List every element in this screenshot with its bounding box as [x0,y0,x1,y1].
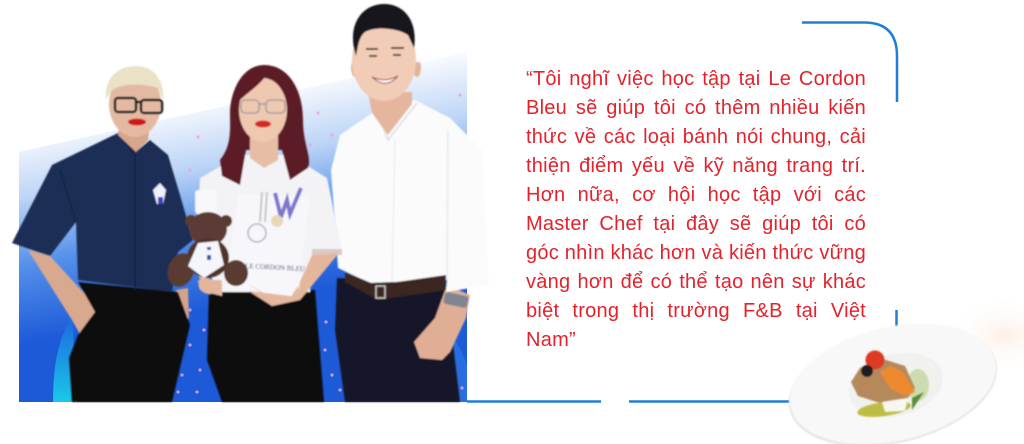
neck [250,135,278,168]
navy shirt [12,133,193,292]
frame line: right short [895,310,898,327]
man's ears [351,62,421,77]
person: man in white shirt [331,4,489,402]
quote text: biệt trong thị trường F&B tại Việt [526,300,866,322]
teddy bear [163,212,248,294]
quote text: Bleu sẽ giúp tôi có thêm nhiều kiến [526,97,866,119]
student shirt [197,155,342,292]
quote text: “Tôi nghĩ việc học tập tại Le Cordon [526,68,866,90]
badge [153,183,166,204]
sauce [856,398,912,420]
panel: blue gradient backdrop [19,52,467,402]
well [842,343,950,427]
person: woman in navy shirt [12,66,193,402]
man's trousers [335,278,460,402]
hands [198,275,300,304]
booklet [225,188,310,297]
man's face [352,19,416,101]
frame line: top right corner [802,22,897,102]
frame line: bottom left [467,400,601,403]
student trousers [207,290,324,402]
neck [118,122,150,152]
belt [345,272,446,300]
blonde hair [106,66,163,100]
man's hair [353,4,415,56]
man's neck [368,92,412,135]
frame line: bottom right [629,400,790,403]
quote text [526,68,866,351]
student glasses [241,100,285,113]
plate glow [945,295,1024,375]
food [851,350,924,412]
quote text: thiện điểm yếu về kỹ năng trang trí. [526,155,866,177]
student face [239,78,287,142]
plated dish [777,305,1009,444]
quote text: Master Chef tại đây sẽ giúp tôi có [526,213,866,235]
arm and hand [414,285,470,360]
quote text: góc nhìn khác hơn và kiến thức vững [526,242,866,264]
glasses [115,98,162,113]
lips [128,118,146,126]
quote text: thức về các loại bánh nói chung, cải [526,126,866,148]
booklet: LE CORDON BLEU [245,262,305,273]
student smile [255,120,271,128]
smile [372,76,398,83]
forearm [247,253,339,306]
plate [777,307,1009,444]
quote text: vàng hơn để có thể tạo nên sự khác [526,271,866,293]
white shirt [331,100,489,292]
white chef hat [195,190,217,214]
red hair [220,65,309,185]
forearm left [28,250,112,334]
quote text: Nam” [526,329,576,351]
person: student with red hair [163,65,342,402]
trousers [69,282,190,402]
quote text: Hơn nữa, cơ hội học tập với các [526,184,866,206]
face [109,71,161,137]
